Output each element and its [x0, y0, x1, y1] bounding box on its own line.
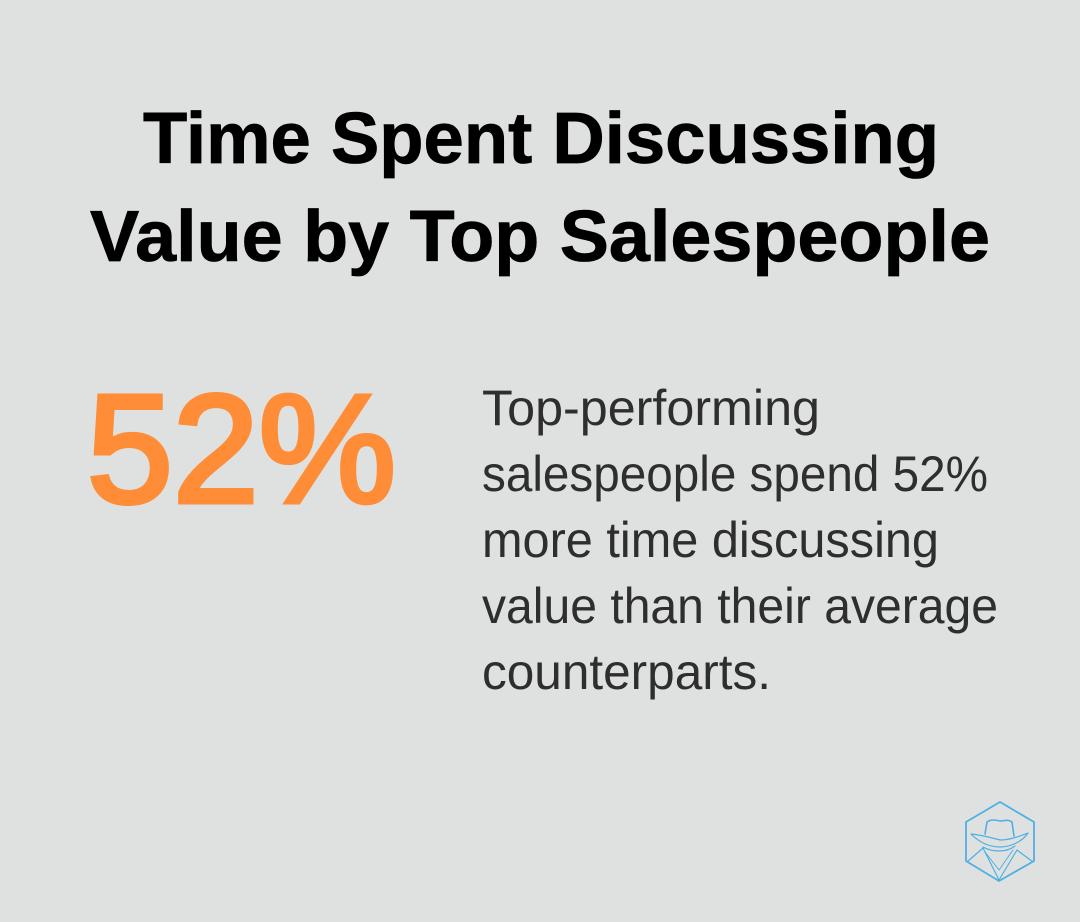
big statistic: 52%: 52% — [87, 363, 396, 535]
title: Value by Top Salespeople — [90, 197, 990, 277]
description text: more time discussing — [482, 512, 939, 568]
title — [90, 99, 990, 277]
description text: salespeople spend 52% — [482, 446, 988, 502]
description text: Top-performing — [482, 380, 820, 436]
description text: value than their average — [482, 578, 998, 634]
description text — [482, 380, 998, 700]
description text: counterparts. — [482, 644, 771, 700]
icon: hexagon spy logo — [966, 802, 1034, 881]
title: Time Spent Discussing — [143, 99, 939, 179]
